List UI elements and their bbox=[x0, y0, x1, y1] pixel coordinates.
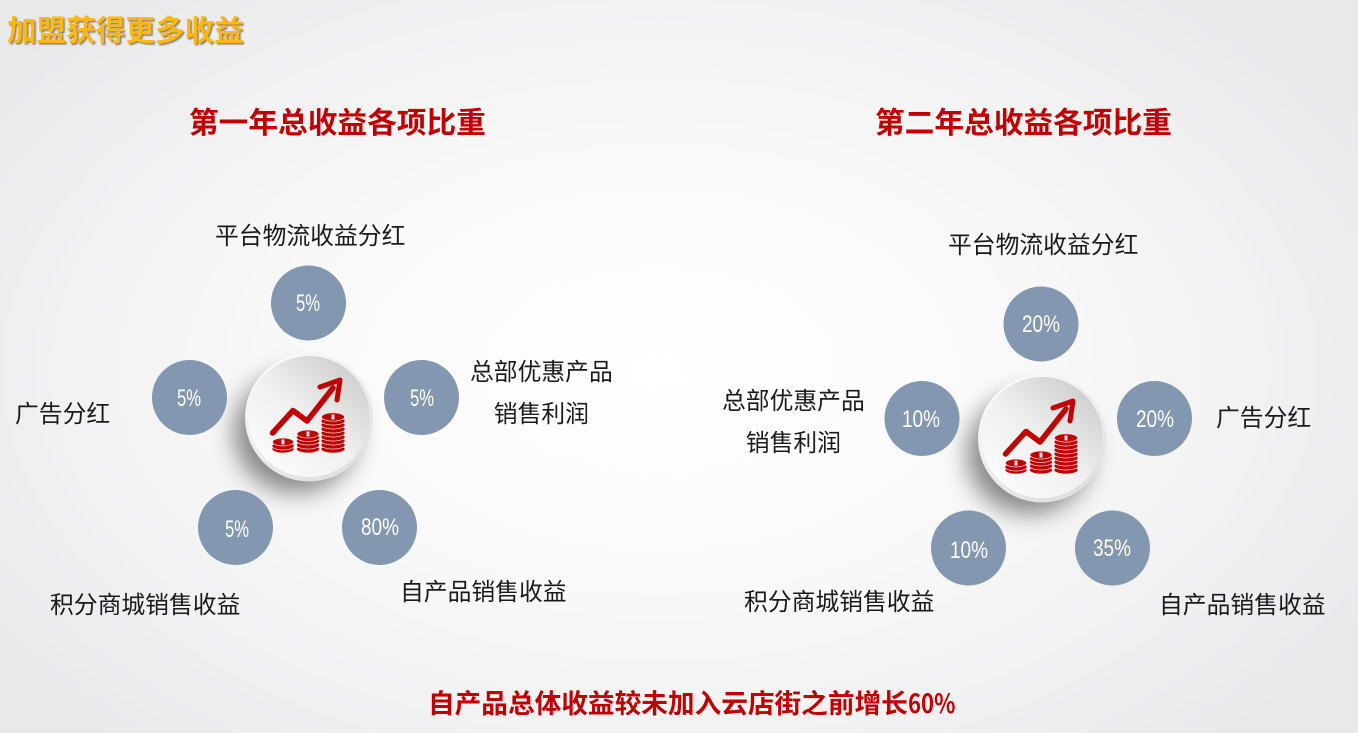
chart: year one radial bbox=[152, 266, 459, 565]
circle: points mall 5%: 5% bbox=[225, 516, 249, 543]
label: HQ discount, year two: 销售利润 bbox=[746, 423, 841, 458]
label: HQ discount, year one bbox=[470, 352, 613, 429]
circle: platform logistics 20%: 20% bbox=[1022, 311, 1060, 338]
circle: HQ discount 10%: 10% bbox=[902, 406, 940, 433]
title: 加盟获得更多收益 bbox=[7, 7, 244, 50]
circle: HQ discount 5%: 5% bbox=[410, 385, 434, 412]
label: own products, year two: 自产品销售收益 bbox=[1159, 585, 1326, 620]
circle: HQ discount 10% bbox=[884, 381, 960, 456]
label: HQ discount, year one: 总部优惠产品 bbox=[470, 352, 613, 387]
circle: platform logistics 5% bbox=[271, 266, 346, 340]
circle: platform logistics 20% bbox=[1004, 286, 1078, 362]
circle: ad dividend 20%: 20% bbox=[1136, 406, 1174, 433]
heading: year one: 第一年总收益各项比重 bbox=[189, 99, 486, 142]
circle: HQ discount 5% bbox=[384, 360, 459, 435]
circle: points mall 10%: 10% bbox=[950, 537, 988, 564]
label: ad dividend, year two: 广告分红 bbox=[1216, 398, 1311, 433]
icon: growth arrow and coins disc, year one bbox=[234, 354, 373, 493]
label: ad dividend, year one: 广告分红 bbox=[15, 394, 110, 429]
circle: own products 80% bbox=[342, 490, 417, 565]
circle: points mall 5% bbox=[198, 490, 273, 565]
circle: ad dividend 5%: 5% bbox=[177, 385, 201, 412]
circle: own products 80%: 80% bbox=[361, 514, 399, 541]
icon: growth arrow and coins disc, year two bbox=[967, 374, 1106, 514]
circle: platform logistics 5%: 5% bbox=[296, 290, 320, 317]
circle: own products 35% bbox=[1075, 510, 1150, 586]
label: HQ discount, year two: 总部优惠产品 bbox=[722, 381, 865, 416]
footer callout: 自产品总体收益较未加入云店街之前增长 bbox=[428, 682, 908, 721]
circle: ad dividend 5% bbox=[152, 360, 227, 435]
circle: ad dividend 20% bbox=[1117, 381, 1192, 456]
heading: year two: 第二年总收益各项比重 bbox=[875, 99, 1172, 142]
label: own products, year one: 自产品销售收益 bbox=[400, 572, 567, 607]
label: platform logistics, year one: 平台物流收益分红 bbox=[215, 216, 405, 251]
label: platform logistics, year two: 平台物流收益分红 bbox=[948, 225, 1138, 260]
label: HQ discount, year one: 销售利润 bbox=[494, 394, 589, 429]
footer callout: 60% bbox=[908, 682, 955, 721]
chart: year two radial bbox=[884, 286, 1192, 586]
circle: points mall 10% bbox=[931, 510, 1006, 586]
label: points mall, year one: 积分商城销售收益 bbox=[50, 585, 240, 620]
label: HQ discount, year two bbox=[722, 381, 865, 458]
label: points mall, year two: 积分商城销售收益 bbox=[744, 582, 934, 617]
circle: own products 35%: 35% bbox=[1093, 535, 1131, 562]
